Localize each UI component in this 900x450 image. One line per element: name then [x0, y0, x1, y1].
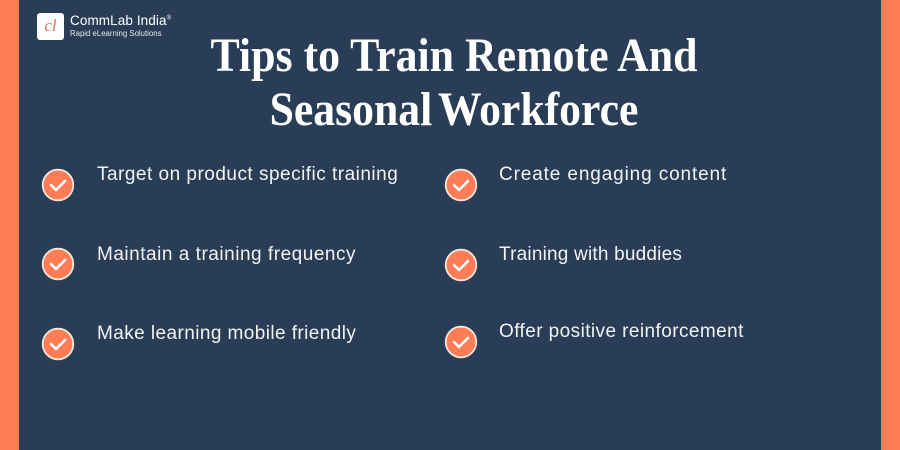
logo icon	[37, 13, 64, 40]
check icon 4	[444, 168, 478, 202]
tip 4: Create engaging content	[499, 164, 727, 185]
check icon 2	[42, 248, 74, 280]
check icon 3	[42, 328, 74, 360]
logo tagline: Rapid eLearning Solutions	[70, 29, 161, 38]
logo	[37, 13, 171, 40]
title line 1: Tips to Train Remote And	[210, 29, 698, 82]
tip 1: Target on product specific training	[97, 164, 398, 185]
check icon 1	[42, 168, 74, 202]
check icon 6	[444, 326, 478, 358]
tip 5: Training with buddies	[499, 244, 682, 265]
logo name: CommLab India®	[70, 13, 171, 28]
check icon 5	[444, 248, 478, 282]
tip 6: Offer positive reinforcement	[499, 321, 744, 342]
tip 3: Make learning mobile friendly	[97, 323, 356, 344]
logo icon: cl	[44, 16, 57, 35]
title line 2: Seasonal Workforce	[270, 83, 638, 136]
tip 2: Maintain a training frequency	[97, 244, 356, 265]
